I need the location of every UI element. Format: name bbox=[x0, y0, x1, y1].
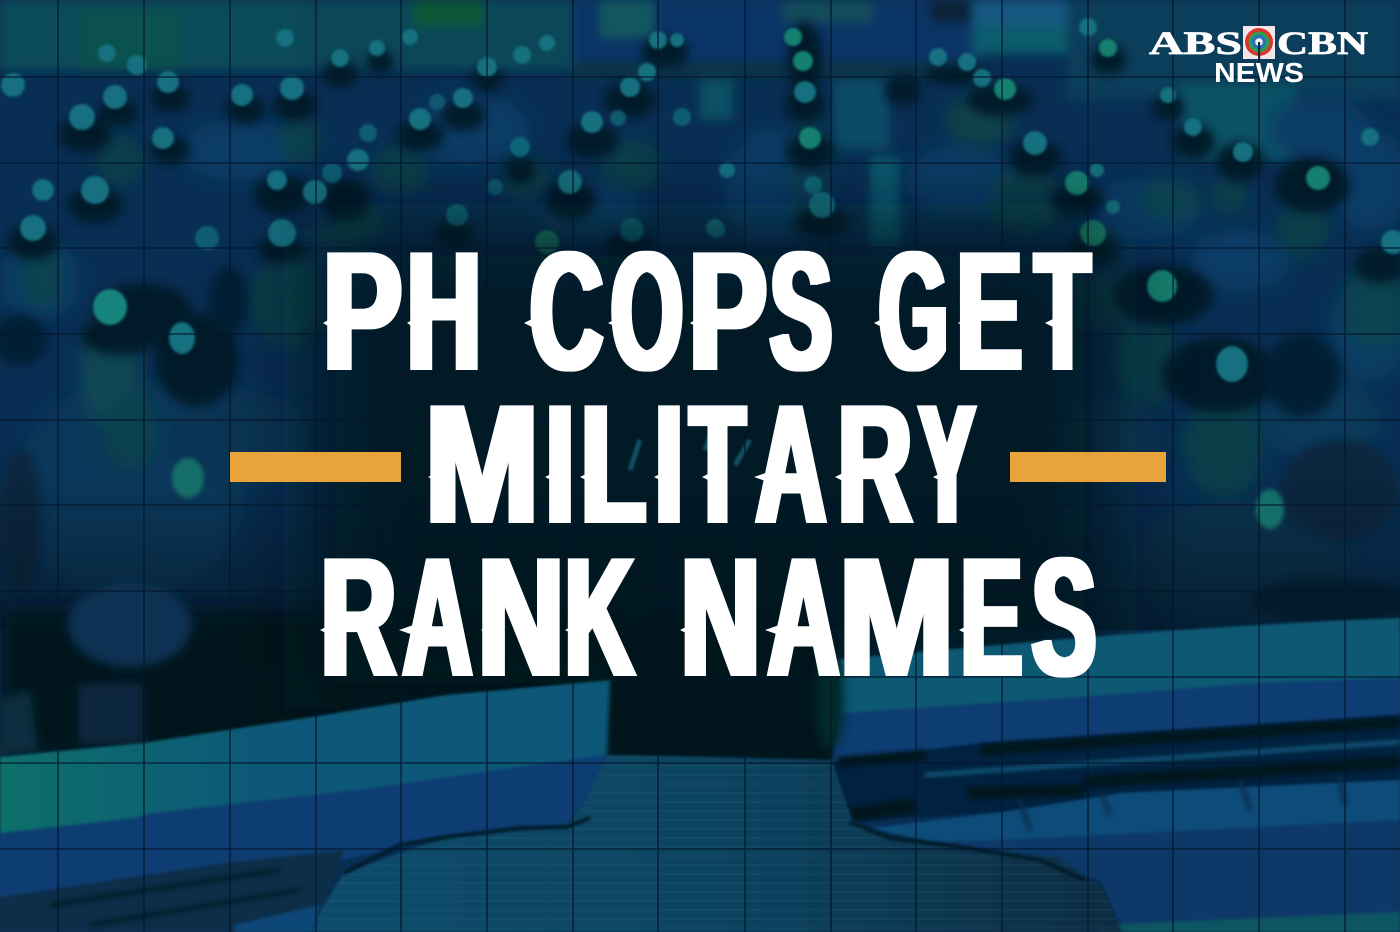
headline line 2: A bbox=[756, 370, 826, 558]
headline line 2: I bbox=[546, 370, 574, 558]
headline text bbox=[321, 217, 1096, 711]
headline line 1: P bbox=[323, 217, 402, 405]
speaker head bbox=[607, 610, 838, 762]
headline line 3: A bbox=[403, 523, 472, 711]
headline line 2: T bbox=[690, 370, 745, 558]
speaker in foreground: head and shirt bbox=[312, 610, 1122, 932]
headline line 2: M bbox=[425, 370, 539, 558]
headline line 2: R bbox=[838, 370, 912, 558]
logo wordmark: ABS: ABS bbox=[1149, 26, 1242, 62]
lower-left officer belly and belt bbox=[0, 583, 192, 755]
headline line 3: M bbox=[839, 523, 954, 711]
right orange rule bbox=[1010, 452, 1166, 482]
headline line 3: K bbox=[565, 523, 634, 711]
cyan reflections on back of head bbox=[630, 425, 750, 470]
speaker shirt bbox=[312, 755, 1122, 932]
railing detail, lower right bbox=[838, 722, 1400, 830]
left orange rule bbox=[230, 452, 401, 482]
curved stage band left bbox=[0, 680, 612, 932]
headline line 1: H bbox=[407, 217, 481, 405]
logo wordmark: CBN: CBN bbox=[1277, 26, 1368, 62]
railing detail, lower left bbox=[50, 870, 300, 925]
headline line 1: G bbox=[879, 217, 948, 405]
chest badges on front officers bbox=[172, 458, 1284, 529]
rear walls and sky tones bbox=[0, 0, 1400, 247]
green-tinted faces bbox=[21, 94, 1400, 497]
lower-left dark zone bbox=[0, 610, 625, 760]
headline line 3: E bbox=[961, 523, 1022, 711]
curved stage band right bbox=[830, 618, 1400, 932]
logo wordmark: NEWS: NEWS bbox=[1214, 57, 1304, 88]
logo emblem: concentric rings bbox=[1243, 26, 1275, 59]
headline line 1: E bbox=[957, 217, 1022, 405]
headline line 2: I bbox=[655, 370, 683, 558]
dark mass behind the headline bbox=[310, 230, 1110, 710]
letter spurs, line 3 bbox=[320, 623, 973, 637]
letter spurs, line 1 bbox=[323, 316, 1059, 330]
ABS-CBN News logo bbox=[1149, 26, 1368, 88]
headline line 1: P bbox=[689, 217, 767, 405]
headline line 3: A bbox=[768, 523, 839, 711]
headline bbox=[320, 217, 1096, 711]
headline line 1: C bbox=[530, 217, 603, 405]
headline line 1: S bbox=[770, 217, 832, 405]
uniform shoulders and shirts bbox=[0, 95, 1400, 620]
headline line 3: S bbox=[1032, 523, 1096, 711]
headline text: Y bbox=[919, 370, 975, 558]
headline line 3: N bbox=[681, 523, 760, 711]
headline line 2: L bbox=[581, 370, 646, 558]
letter spurs, line 2 bbox=[428, 470, 947, 484]
headline line 3: R bbox=[321, 523, 396, 711]
headline line 1: O bbox=[611, 217, 683, 405]
headline line 3: N bbox=[478, 523, 564, 711]
shade falling toward lower crowd bbox=[0, 480, 1400, 630]
headline line 1: T bbox=[1035, 217, 1090, 405]
teal cap badges bbox=[1, 18, 1400, 382]
dark peaked caps and shadows bbox=[0, 22, 1400, 622]
